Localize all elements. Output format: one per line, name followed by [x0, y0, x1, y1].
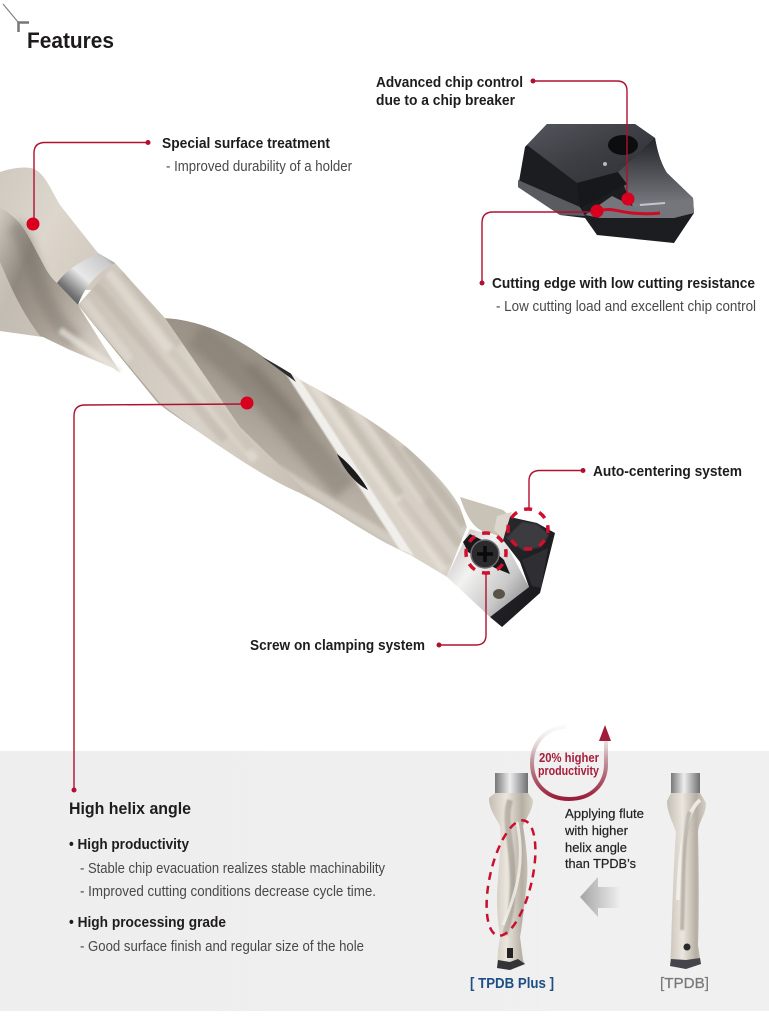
band	[57, 253, 115, 305]
main drill image	[0, 160, 555, 627]
callout: cutting edge: - Low cutting load and excellent chip control	[496, 299, 756, 315]
productivity arrow: 20% higher	[539, 751, 599, 765]
explanation text: with higher	[564, 823, 629, 838]
insert image	[518, 124, 694, 243]
callout: auto-centering system: Auto-centering system	[593, 463, 742, 480]
second land with streaks	[285, 372, 467, 577]
text block: high helix angle: - Good surface finish and regular size of the hole	[80, 939, 364, 955]
head wedge	[460, 497, 512, 538]
text block: high helix angle: - Improved cutting conditions decrease cycle time.	[80, 884, 376, 900]
silver head	[447, 529, 529, 617]
drill: TPDB	[667, 773, 706, 969]
text block: high helix angle: High helix angle	[69, 799, 191, 818]
screw	[471, 540, 499, 568]
explanation text: Applying flute	[565, 806, 644, 821]
grey arrow	[580, 877, 622, 917]
background panel: high helix angle	[0, 751, 769, 1011]
callout: screw on clamping system: Screw on clamping system	[250, 637, 425, 654]
callout: cutting edge	[480, 204, 756, 315]
insert hole	[608, 135, 638, 155]
callout: advanced chip control	[376, 74, 634, 206]
bright strip and dark spot	[284, 371, 414, 556]
coolant hole	[493, 589, 505, 599]
shank collar	[0, 160, 130, 290]
callout: special surface treatment: Special surface treatment	[162, 135, 330, 152]
callout: screw on clamping system	[250, 533, 506, 654]
label: TPDB: [TPDB]	[660, 975, 709, 992]
second flute	[78, 305, 420, 560]
first land with streaks	[78, 263, 315, 500]
text block: high helix angle	[69, 799, 386, 955]
productivity arrow: productivity	[538, 764, 599, 778]
left flute	[0, 208, 120, 372]
drill: TPDB Plus	[477, 773, 545, 970]
explanation text	[564, 806, 644, 871]
callout: advanced chip control: Advanced chip control	[376, 74, 523, 91]
insert top face	[527, 124, 655, 183]
explanation text: than TPDB’s	[565, 856, 636, 871]
productivity arrow	[532, 725, 611, 799]
insert chip pocket	[618, 138, 693, 207]
text block: high helix angle: • High productivity	[69, 836, 190, 853]
explanation text: helix angle	[565, 840, 627, 855]
callout: special surface treatment	[26, 135, 352, 230]
callout: high helix angle leader	[72, 396, 254, 792]
insert edge	[585, 196, 694, 218]
title: Features	[27, 28, 114, 53]
screw pocket	[463, 534, 510, 574]
text block: high helix angle: • High processing grade	[69, 914, 226, 931]
callout: auto-centering system	[508, 463, 742, 549]
insert front dark face	[577, 172, 627, 208]
callout: advanced chip control: due to a chip breaker	[376, 92, 515, 109]
text block: high helix angle: - Stable chip evacuation realizes stable machinability	[80, 861, 386, 877]
insert	[490, 517, 555, 627]
callout: special surface treatment: - Improved durability of a holder	[166, 159, 352, 175]
label: TPDB Plus: [ TPDB Plus ]	[470, 975, 554, 992]
corner mark	[3, 4, 29, 32]
insert lower left strip	[518, 180, 585, 216]
